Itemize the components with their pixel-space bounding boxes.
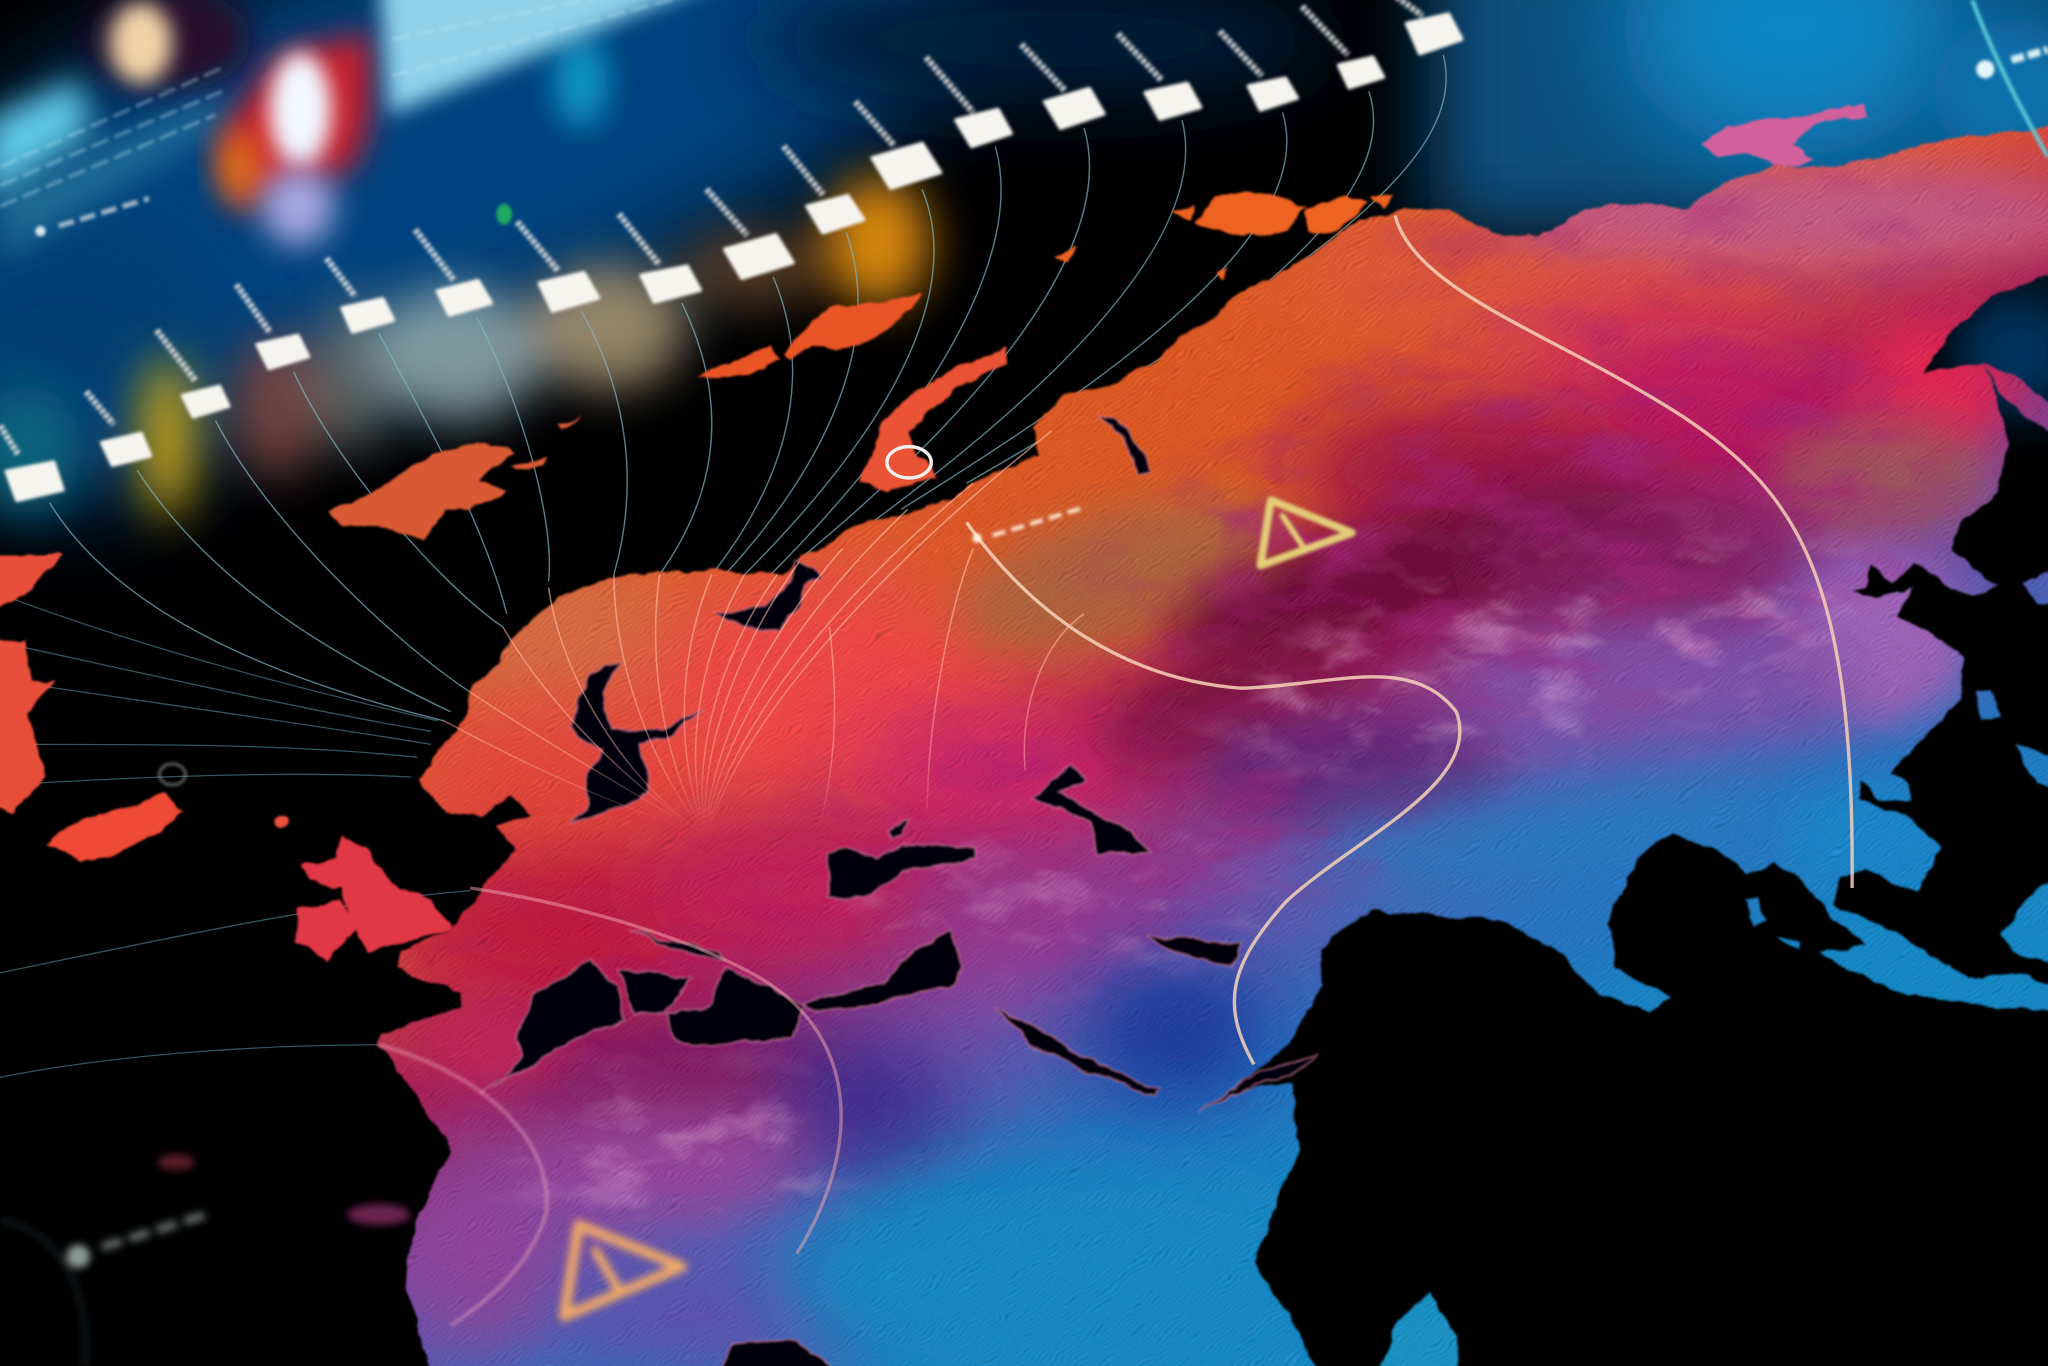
slider 12 — [926, 57, 1011, 146]
island: Faroe speck — [272, 815, 287, 828]
slider 3 — [157, 330, 229, 417]
island: Novaya Zemlya — [859, 350, 1008, 491]
sea: Adriatic — [630, 930, 726, 960]
slider 9 — [707, 189, 793, 278]
top-right marker line and dot — [1972, 0, 2048, 157]
blurred light band behind sliders — [0, 176, 930, 518]
slider 17 — [1392, 0, 1462, 54]
sea: Western Mediterranean — [478, 960, 624, 1094]
slider 5 — [327, 259, 393, 332]
sea: Tyrrhenian — [619, 969, 692, 1016]
sea: Kola inlet — [716, 559, 820, 631]
slider 6 — [415, 230, 491, 315]
sea: Red Sea — [995, 1008, 1160, 1097]
lake: central Africa — [712, 1339, 849, 1366]
island: Greenland edge — [0, 555, 61, 812]
slider handles row — [0, 0, 1462, 500]
status dot: green — [496, 204, 512, 225]
blurred marker bottom-left — [0, 1154, 410, 1366]
icon: warning triangle, central Asia — [1260, 500, 1352, 565]
fan lines from the Atlantic — [0, 594, 470, 1077]
slider 11 — [856, 102, 940, 188]
island: Severnaya Zemlya — [1055, 191, 1390, 279]
slider 16 — [1302, 7, 1383, 87]
island: Franz Josef Land — [699, 294, 921, 379]
sea: White Sea — [1100, 415, 1152, 475]
slider 2 — [86, 392, 150, 465]
sea: Baltic — [569, 661, 707, 825]
sea: Black Sea — [825, 842, 977, 900]
route: central arc — [967, 522, 1460, 1064]
small data label top-left — [35, 199, 149, 236]
route: Mediterranean arc — [470, 888, 841, 1254]
island: Iceland — [46, 794, 183, 862]
island: UK and Ireland — [295, 836, 452, 960]
slider 10 — [784, 146, 863, 232]
island: Svalbard — [329, 418, 581, 538]
slider 4 — [236, 285, 308, 368]
marker: ring in Atlantic — [159, 764, 185, 785]
map: Eurasia and Africa heat field — [375, 124, 2048, 1366]
marker: ring on Novaya Zemlya — [887, 447, 931, 478]
island: New Siberian — [1701, 103, 1869, 167]
route: northern arc — [1395, 215, 1852, 888]
sea: Caspian — [1034, 764, 1149, 855]
blurred lights top-left — [0, 0, 731, 261]
sea: Persian Gulf — [1147, 935, 1241, 966]
slider 13 — [1021, 44, 1104, 128]
inland seas — [478, 415, 1319, 1366]
sea: Gulf of Aden — [1199, 1055, 1319, 1113]
slider 15 — [1220, 31, 1297, 110]
sea: Levant basin — [805, 930, 961, 1012]
sea: Eastern Mediterranean — [669, 966, 805, 1046]
route: lower-left arc — [379, 1045, 547, 1326]
data label on map — [972, 507, 1087, 543]
slider 14 — [1118, 34, 1200, 119]
slider 8 — [619, 214, 700, 302]
slider connector lines — [50, 55, 1446, 721]
icon: warning triangle, Africa — [564, 1225, 682, 1316]
sea: Azov — [888, 820, 909, 841]
slider 1 — [0, 426, 63, 500]
fan lines over land — [444, 431, 1084, 862]
slider 7 — [517, 222, 598, 311]
islands — [0, 103, 1869, 960]
